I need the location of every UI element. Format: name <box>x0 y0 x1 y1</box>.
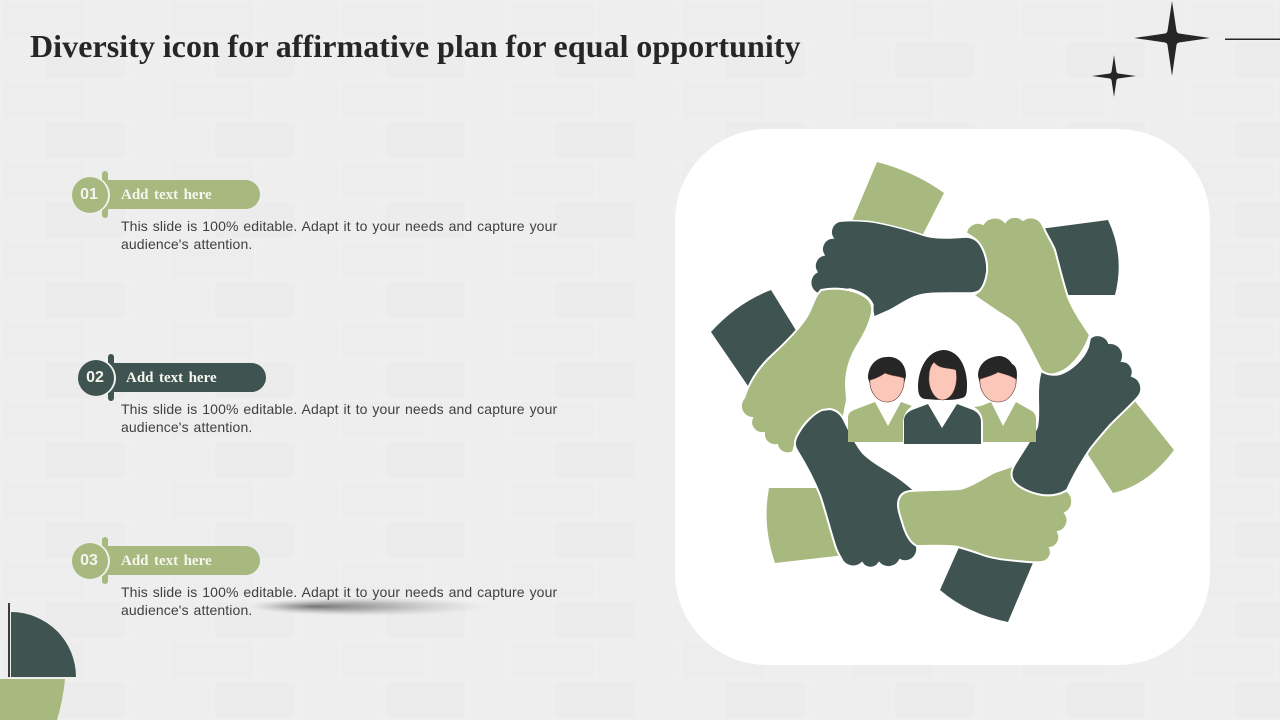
cuff: right green <box>1085 395 1174 493</box>
badge 01 pill <box>72 171 260 218</box>
badge 02 pill: 02 <box>86 369 104 386</box>
badge 03 pill: Add text here <box>121 553 212 569</box>
badge 01 pill: 01 <box>80 186 98 203</box>
corner decoration <box>0 603 76 720</box>
hand: top dark <box>811 221 990 317</box>
cuff: left-bottom green <box>767 488 845 563</box>
text block 2 <box>121 401 557 435</box>
hand: left green <box>741 289 872 453</box>
title: Diversity icon for affirmative plan for equal opportunity <box>30 28 801 64</box>
people group <box>848 350 1036 444</box>
text block 3: audience's attention. <box>121 602 252 618</box>
text block 3 <box>121 584 557 618</box>
person: left <box>848 357 912 442</box>
badge 02 pill: Add text here <box>126 370 217 386</box>
text block 1: audience's attention. <box>121 236 252 252</box>
person: right <box>974 356 1036 442</box>
panel: white rounded card <box>675 129 1210 665</box>
cuff: top green <box>850 162 944 240</box>
soft shadow <box>257 598 466 615</box>
text block 3: This slide is 100% editable. Adapt it to your needs and capture your <box>121 584 557 600</box>
badge 02 pill <box>78 354 266 401</box>
person: centre <box>904 350 981 444</box>
text block 1 <box>121 218 557 252</box>
badge 03 pill: 03 <box>80 552 98 569</box>
badge 01 pill: Add text here <box>121 187 212 203</box>
text block 1: This slide is 100% editable. Adapt it to your needs and capture your <box>121 218 557 234</box>
hand: right dark <box>1012 335 1141 495</box>
icon: circle of clasped hands <box>711 162 1174 622</box>
item 3 <box>72 537 260 584</box>
item 1 <box>72 171 260 218</box>
item 2 <box>78 354 266 401</box>
icon: decorative stars and line <box>1092 1 1280 97</box>
hand: bottom-left dark <box>795 409 917 568</box>
hand: bottom green <box>898 466 1072 562</box>
hand: top-right green <box>966 217 1090 375</box>
cuff: top-right dark <box>1040 220 1119 295</box>
cuff: left dark <box>711 290 797 386</box>
text block 2: This slide is 100% editable. Adapt it to your needs and capture your <box>121 401 557 417</box>
badge 03 pill <box>72 537 260 584</box>
text block 2: audience's attention. <box>121 419 252 435</box>
cuff: bottom dark <box>940 545 1035 622</box>
